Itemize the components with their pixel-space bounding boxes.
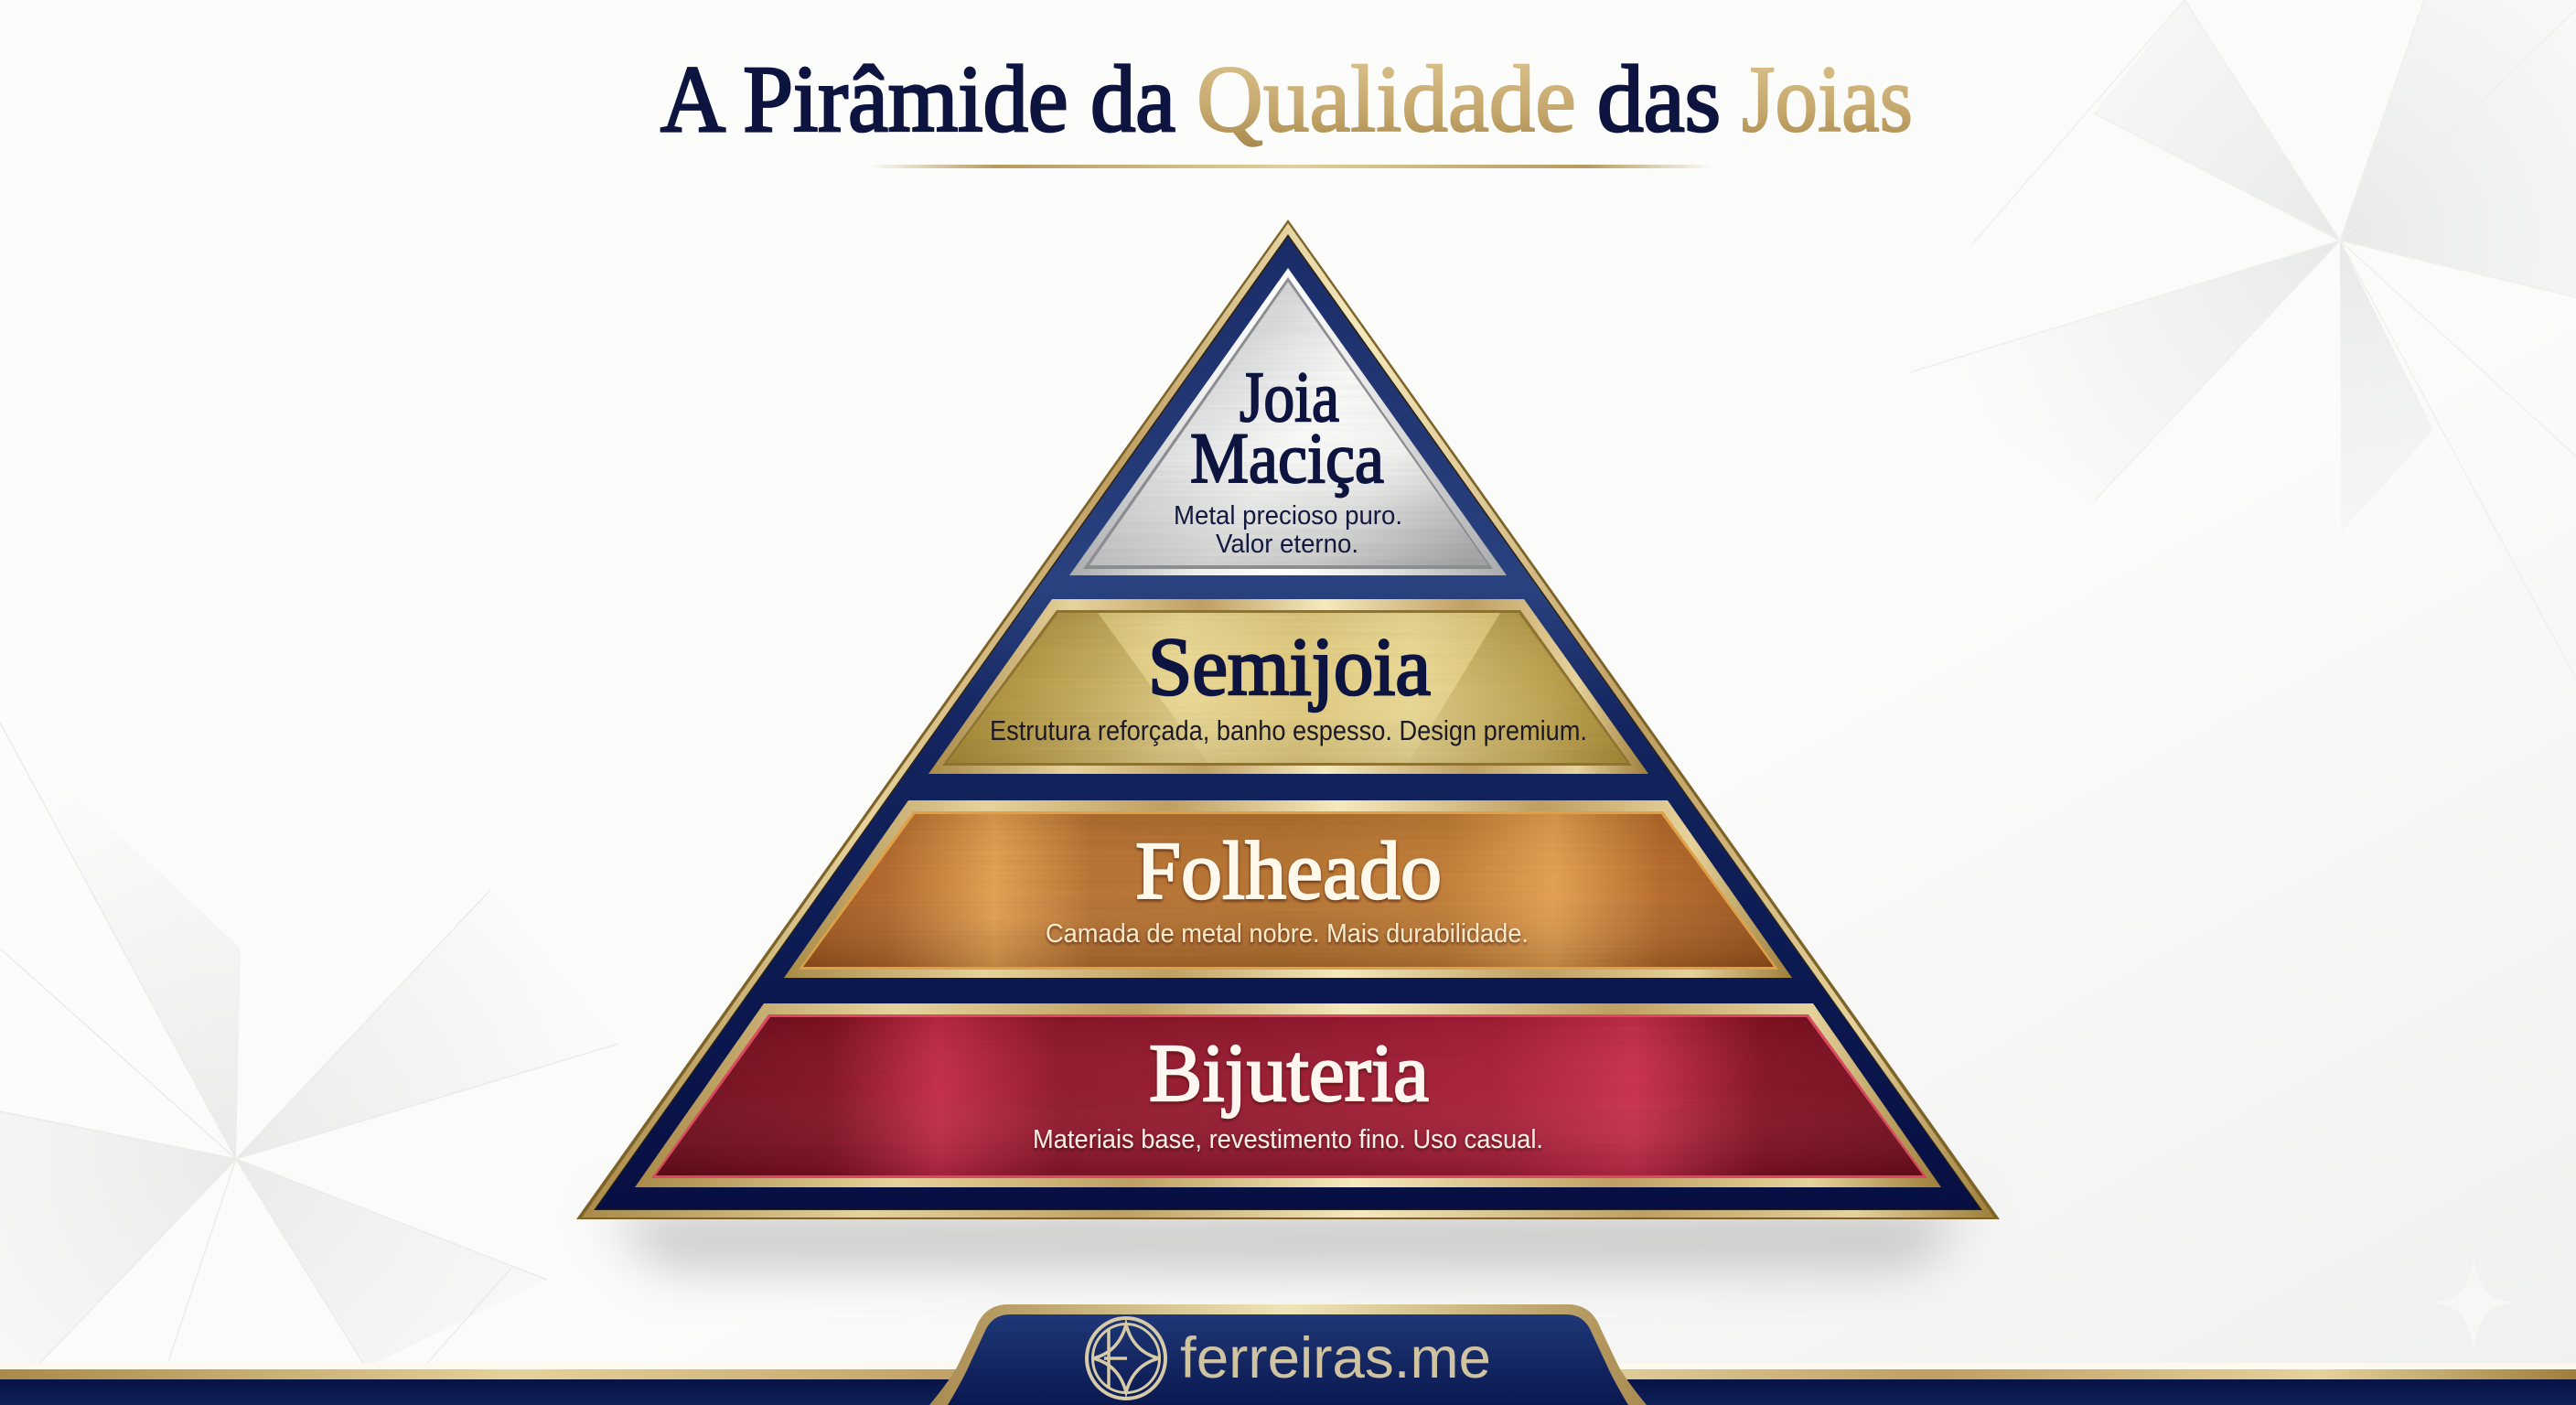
description: Estrutura reforçada, banho espesso. Design premium. bbox=[990, 714, 1587, 746]
pyramid shadow bbox=[604, 1212, 1972, 1267]
footer bar bbox=[0, 1363, 2576, 1405]
description: Materiais base, revestimento fino. Uso casual. bbox=[1033, 1125, 1543, 1154]
brand name: ferreiras.me bbox=[1180, 1326, 1491, 1390]
outer gold frame bbox=[576, 220, 2000, 1219]
heading: Folheado bbox=[1135, 826, 1442, 917]
title: das bbox=[1597, 47, 1721, 152]
footer tab bbox=[929, 1304, 1647, 1405]
tier: Folheado bbox=[784, 800, 1792, 978]
icon: faint sparkle watermark bbox=[2430, 1259, 2517, 1347]
background faceted star: top right bbox=[1910, 0, 2576, 679]
tier: Bijuteria bbox=[635, 1003, 1941, 1187]
description: Metal precioso puro. bbox=[1174, 501, 1402, 531]
tier: Joia Maciça: Valor eterno. bbox=[1216, 530, 1358, 559]
icon: ferreiras logo bbox=[1087, 1318, 1165, 1399]
background faceted star: lower left bbox=[0, 723, 618, 1367]
tier: Joia Maciça bbox=[1069, 268, 1507, 575]
title: Qualidade bbox=[1197, 47, 1576, 152]
description: Camada de metal nobre. Mais durabilidade. bbox=[1046, 919, 1529, 949]
heading: Semijoia bbox=[1148, 622, 1431, 713]
pyramid bbox=[576, 220, 2000, 1219]
navy body bbox=[596, 237, 1980, 1209]
title bbox=[660, 47, 1913, 152]
heading: Joia bbox=[1240, 357, 1339, 436]
heading: Bijuteria bbox=[1149, 1028, 1429, 1119]
tier: Semijoia bbox=[928, 599, 1648, 774]
tier: Joia Maciça: Maciça bbox=[1190, 418, 1384, 498]
title: Joias bbox=[1742, 47, 1913, 152]
title: A Pirâmide da bbox=[660, 47, 1175, 152]
title underline bbox=[869, 165, 1712, 168]
